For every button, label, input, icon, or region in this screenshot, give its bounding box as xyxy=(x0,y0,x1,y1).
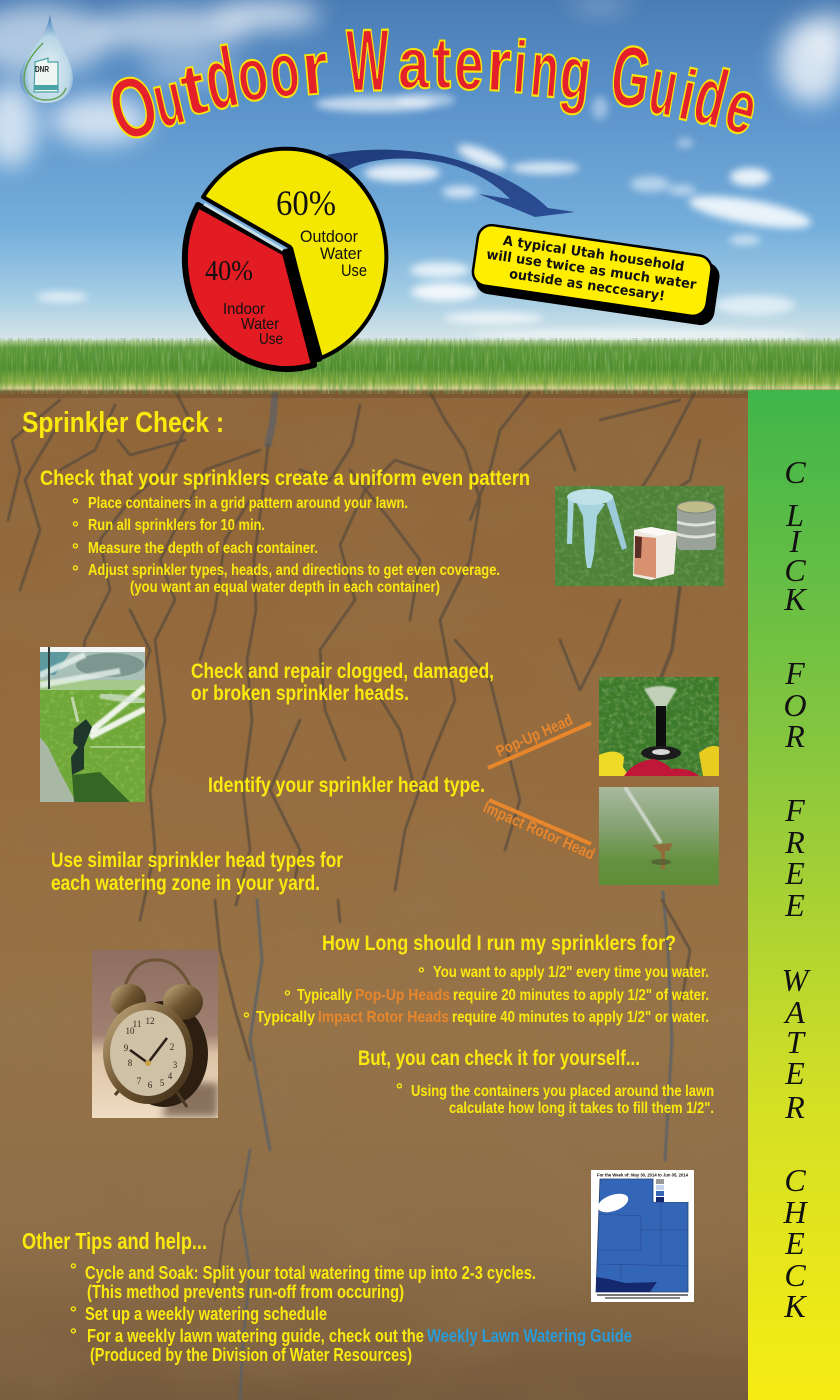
text block: how long to run sprinklers: ° xyxy=(418,964,425,983)
label: outdoor water use: Outdoor xyxy=(300,227,358,246)
pie divider xyxy=(289,248,318,362)
text block: how long to run sprinklers: require 40 minutes to apply 1/2" or water. xyxy=(452,1009,709,1026)
side bar: click for free water check: E xyxy=(784,855,805,891)
photo: alarm clock: 8 xyxy=(128,1058,133,1068)
photo: sprinkler spraying xyxy=(40,647,145,802)
soil background with roots xyxy=(0,386,750,1400)
side bar: click for free water check: T xyxy=(786,1024,806,1060)
photo: alarm clock: 2 xyxy=(170,1042,174,1052)
side bar: click for free water check: C xyxy=(784,1257,806,1293)
title: t xyxy=(174,48,214,132)
text block: uniform pattern check: Run all sprinklers for 10 min. xyxy=(88,517,265,534)
heading: sprinkler check: Sprinkler Check : xyxy=(22,407,224,439)
arrow line: pop-up head xyxy=(488,723,591,768)
side bar: click for free water check: F xyxy=(784,792,805,828)
photo: alarm clock: 5 xyxy=(160,1078,165,1088)
text block: other tips list: For a weekly lawn watering guide, check out the xyxy=(87,1326,424,1346)
title: d xyxy=(197,28,244,128)
side bar: click for free water check: R xyxy=(784,1089,805,1125)
photo: alarm clock xyxy=(92,950,218,1118)
side bar: click for free water check: F xyxy=(784,655,805,691)
side bar: click for free water check: R xyxy=(784,824,805,860)
title xyxy=(99,11,767,160)
text block: how long to run sprinklers: require 20 minutes to apply 1/2" of water. xyxy=(453,987,709,1004)
title: r xyxy=(485,23,513,108)
label: impact rotor head: Impact Rotor Head xyxy=(480,799,597,863)
title: a xyxy=(398,23,430,104)
text block: how long to run sprinklers: You want to apply 1/2" every time you water. xyxy=(433,964,709,981)
title: u xyxy=(145,56,192,144)
side bar: click for free water check: E xyxy=(784,1055,805,1091)
photo: alarm clock: 4 xyxy=(168,1071,173,1081)
text block: similar head types: Use similar sprinkler head types for xyxy=(51,849,343,872)
side bar: click for free water check: I xyxy=(789,523,802,559)
label: indoor water use: Water xyxy=(241,316,280,333)
text block: other tips list: (Produced by the Division of Water Resources) xyxy=(90,1345,412,1365)
text block: uniform pattern check: ° xyxy=(72,562,79,581)
title: e xyxy=(716,61,767,152)
pie slice: outdoor 60 percent xyxy=(203,149,386,358)
photo: catch containers on lawn xyxy=(555,486,724,586)
label: indoor water use xyxy=(223,301,283,348)
icon: DNR water drop logo xyxy=(20,14,73,103)
side bar: click for free water check: O xyxy=(783,687,807,723)
grass strip xyxy=(0,340,840,392)
label: pop-up head: Pop-Up Head xyxy=(494,712,576,761)
side bar: click for free water check: A xyxy=(783,994,805,1030)
title: t xyxy=(433,24,451,104)
map: weekly lawn watering guide xyxy=(591,1170,694,1302)
label: indoor water use: Use xyxy=(259,331,283,348)
text block: how long to run sprinklers: Impact Rotor Heads xyxy=(318,1009,449,1026)
side bar: click for free water check: C xyxy=(784,552,806,588)
text block: other tips list: Cycle and Soak: Split your total watering time up into 2-3 cycles. xyxy=(85,1263,536,1283)
text block: uniform pattern check: Measure the depth of each container. xyxy=(88,540,318,557)
text block: other tips list: ° xyxy=(70,1303,77,1322)
label: 40 percent: 40% xyxy=(205,255,253,287)
title: e xyxy=(454,22,484,106)
title: W xyxy=(346,11,390,110)
title: i xyxy=(673,56,703,137)
photo: alarm clock: 7 xyxy=(137,1076,142,1086)
label: indoor water use: Indoor xyxy=(223,301,266,318)
side bar: click for free water check: H xyxy=(782,1194,808,1230)
label: outdoor water use: Water xyxy=(320,244,362,263)
text block: similar head types: each watering zone in your yard. xyxy=(51,872,320,895)
text block: uniform pattern check: Place containers in a grid pattern around your lawn. xyxy=(88,495,408,512)
text block: check and repair heads: Check and repair clogged, damaged, xyxy=(191,660,494,683)
text block: other tips list: ° xyxy=(70,1325,77,1344)
side bar: click for free water check: K xyxy=(783,1288,807,1324)
callout: A typical Utah household xyxy=(502,233,685,275)
title: o xyxy=(232,32,273,118)
side bar: click for free water check: C xyxy=(784,454,806,490)
text block: other tips list: Set up a weekly watering schedule xyxy=(85,1304,327,1324)
title: O xyxy=(99,56,168,160)
title: o xyxy=(264,25,304,115)
photo: alarm clock: 9 xyxy=(124,1043,129,1053)
label: outdoor water use: Use xyxy=(341,261,367,280)
text block: how long to run sprinklers: Typically xyxy=(256,1009,315,1026)
sky background xyxy=(0,0,840,350)
title: r xyxy=(298,26,332,112)
arrow from pie to callout xyxy=(327,150,575,217)
pie chart xyxy=(185,149,386,369)
text block: how long to run sprinklers xyxy=(243,932,709,1028)
text block: check it yourself: But, you can check it for yourself... xyxy=(358,1047,640,1070)
text block: uniform pattern check: Adjust sprinkler types, heads, and directions to get even coverage. xyxy=(88,562,500,579)
photo: alarm clock: 12 xyxy=(146,1016,154,1026)
title: n xyxy=(528,24,563,114)
text block: check it yourself: ° xyxy=(396,1080,403,1099)
side bar: click for free water check: E xyxy=(784,887,805,923)
text block: uniform pattern check: ° xyxy=(72,495,79,514)
text block: check and repair heads: or broken sprinkler heads. xyxy=(191,682,409,705)
text block: other tips list: (This method prevents run-off from occuring) xyxy=(87,1282,404,1302)
text block: check it yourself: Using the containers you placed around the lawn xyxy=(411,1083,714,1100)
arrow line: impact rotor head xyxy=(489,800,591,844)
text block: other tips list: Weekly Lawn Watering Guide xyxy=(427,1326,632,1346)
title: u xyxy=(643,39,685,134)
icon: DNR water drop logo: DNR xyxy=(35,65,49,74)
heading: other tips: Other Tips and help... xyxy=(22,1228,207,1254)
photo: alarm clock: 11 xyxy=(133,1019,141,1029)
title: i xyxy=(511,26,530,110)
text block: uniform pattern check: ° xyxy=(72,540,79,559)
callout: will use twice as much water xyxy=(485,247,698,293)
text block: similar head types xyxy=(51,849,343,895)
label: outdoor water use xyxy=(300,227,367,280)
text block: other tips list xyxy=(70,1260,632,1365)
text block: check and repair heads xyxy=(191,660,494,705)
title: d xyxy=(686,51,736,145)
photo: alarm clock: 3 xyxy=(173,1060,178,1070)
text block: other tips list: ° xyxy=(70,1260,77,1279)
text block: how long to run sprinklers: ° xyxy=(243,1009,250,1028)
photo: alarm clock: 10 xyxy=(126,1026,135,1036)
side bar: click for free water check: L xyxy=(785,497,804,533)
side bar: click for free water check: W xyxy=(782,962,812,998)
text block: identify head type: Identify your sprinkler head type. xyxy=(208,774,485,797)
photo: impact rotor sprinkler xyxy=(599,787,719,885)
side bar: click for free water check: E xyxy=(784,1225,805,1261)
side bar: click for free water check: R xyxy=(784,718,805,754)
label: 60 percent: 60% xyxy=(276,183,336,223)
pie gap xyxy=(204,204,283,250)
text block: uniform pattern check: (you want an equal water depth in each container) xyxy=(130,579,440,596)
callout: outside as neccesary! xyxy=(508,266,666,305)
side bar: click for free water check xyxy=(748,390,840,1400)
text block: check it yourself xyxy=(358,1047,714,1117)
photo: alarm clock: 6 xyxy=(148,1080,153,1090)
callout xyxy=(470,223,722,327)
title: g xyxy=(556,31,595,117)
title: G xyxy=(605,26,656,127)
text block: uniform pattern check xyxy=(40,467,530,596)
pie slice: indoor 40 percent xyxy=(185,205,314,369)
text block: how long to run sprinklers: Typically xyxy=(297,987,352,1004)
text block: uniform pattern check: ° xyxy=(72,518,79,537)
photo: pop-up sprinkler head xyxy=(599,677,719,776)
map: weekly lawn watering guide: For the Week of: May 30, 2014 to Jun 05, 2014 xyxy=(597,1172,688,1178)
side bar: click for free water check: C xyxy=(784,1162,806,1198)
text block: check it yourself: calculate how long it takes to fill them 1/2". xyxy=(449,1100,714,1117)
text block: uniform pattern check: Check that your sprinklers create a uniform even pattern xyxy=(40,467,530,490)
text block: how long to run sprinklers: How Long should I run my sprinklers for? xyxy=(322,932,676,955)
text block: how long to run sprinklers: ° xyxy=(284,987,291,1006)
side bar: click for free water check: K xyxy=(783,581,807,617)
text block: how long to run sprinklers: Pop-Up Heads xyxy=(355,987,450,1004)
